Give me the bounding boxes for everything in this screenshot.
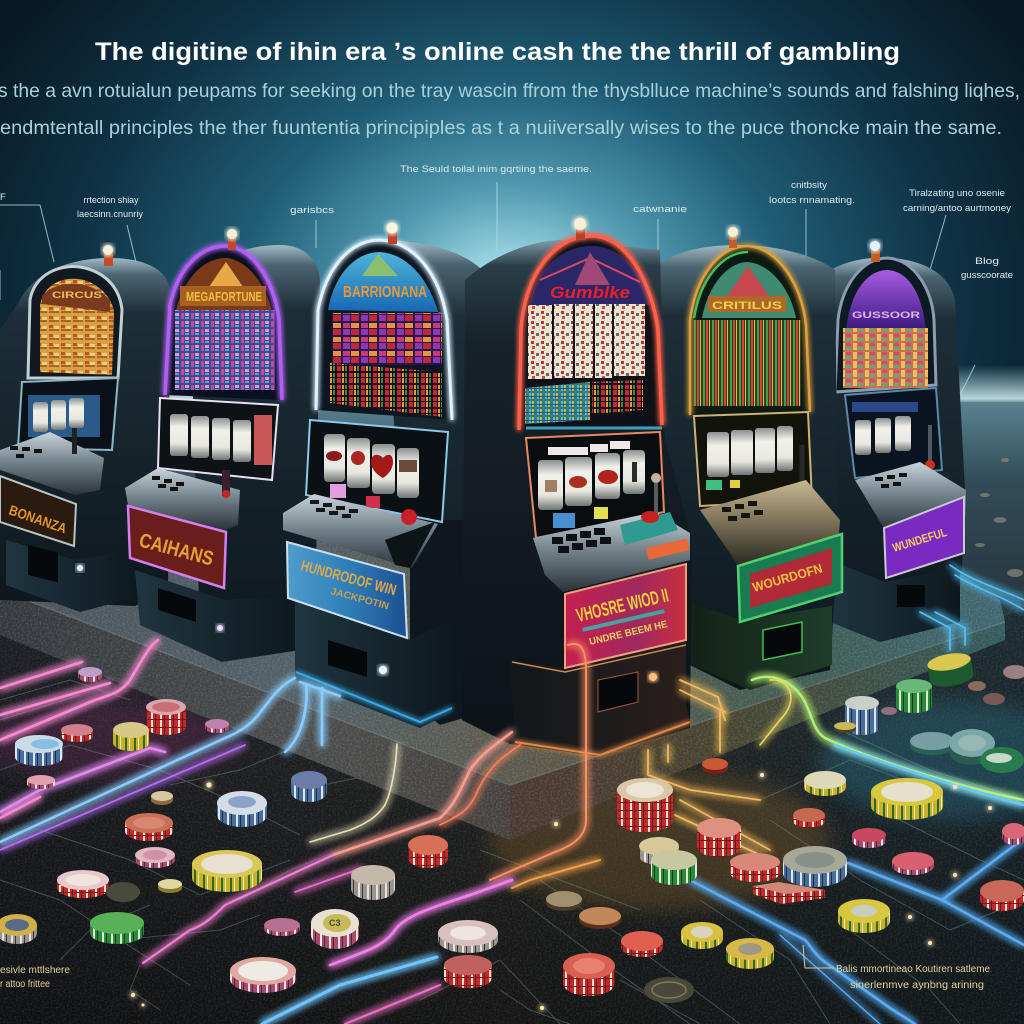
chip: flat red white [753, 882, 825, 904]
label blog: Blog [975, 256, 999, 267]
belly glass [738, 534, 842, 622]
deck [855, 462, 966, 530]
base [295, 598, 452, 728]
slot machine 5: green and gold: CRITILUS [712, 300, 782, 312]
cabinet [380, 240, 480, 722]
chip: pink flat [27, 775, 55, 789]
chip: red small [61, 724, 93, 742]
footnote bottom left [0, 965, 70, 990]
chip: dark bronze [644, 977, 694, 1003]
chip: pink far [205, 719, 229, 733]
cream line [310, 744, 397, 842]
chip: green stack [896, 679, 932, 713]
chips: left field [0, 667, 498, 993]
marquee and paytable [690, 246, 810, 415]
footnote bottom left: esivle mttlshere [0, 965, 70, 976]
reels window [694, 412, 812, 506]
lever [72, 428, 77, 454]
chip: teal round [949, 729, 995, 765]
chip: pink [135, 847, 175, 868]
chip: small red 2 [793, 808, 825, 828]
belly glass [0, 476, 76, 546]
chip: white blue [217, 791, 267, 827]
deck [700, 480, 840, 565]
beacon [386, 222, 398, 244]
chip: yellow edge [0, 914, 37, 944]
marquee and paytable [165, 246, 282, 400]
slot machine 4: centre red [462, 218, 692, 756]
chip: green spill [980, 747, 1024, 773]
chip: pink far lower [264, 918, 300, 936]
chip: dark [106, 882, 140, 902]
reels window [18, 378, 118, 450]
footnote bottom right: Balis mmortineao Koutiren satleme [836, 964, 990, 975]
chip: pink red stack [697, 818, 741, 857]
chip: tan [546, 891, 582, 911]
footnote bottom right [803, 945, 990, 991]
chip: blue white [15, 735, 63, 766]
chips: right field [546, 650, 1024, 1003]
start button [401, 509, 417, 525]
label far left: F [0, 192, 6, 203]
lever [928, 425, 932, 470]
start button [641, 511, 659, 523]
scattered coins on far floor [975, 458, 1023, 577]
cabinet side [462, 240, 692, 756]
base [135, 570, 300, 662]
chip: cream pair back [639, 837, 679, 865]
chip: red stack near centre [408, 835, 448, 868]
belly glass [287, 542, 407, 638]
cabinet [650, 245, 838, 690]
lever [654, 482, 658, 520]
chip: grey stack upper [845, 696, 879, 735]
foreground circuit floor [0, 590, 1024, 1024]
marquee and paytable [519, 236, 662, 430]
label machine 1: laecsinn.cnunriy [77, 209, 143, 220]
red lead from belly to floor [490, 644, 586, 880]
stone platform [0, 540, 1005, 840]
chip: yellow [838, 899, 890, 933]
label machine 1 [77, 195, 143, 220]
pink and blue bottom lines [330, 880, 512, 965]
horizon glow band [0, 365, 1024, 407]
slot machine 3: blue: BARRIONANA [343, 284, 427, 301]
cabinet [800, 258, 965, 640]
chip: grey large [783, 846, 847, 887]
label machine 5 right: lootcs rnnamating. [769, 195, 855, 206]
belly glass [128, 506, 226, 588]
base [510, 640, 690, 755]
beacon [728, 227, 738, 248]
beacon [227, 229, 237, 250]
label machine 5: catwnanie [633, 204, 687, 215]
slot machine 5: green and gold: WOURDOFN [751, 561, 824, 595]
purple shadow of blue line [0, 745, 245, 850]
green to blue line [752, 677, 1024, 800]
label blog [961, 256, 1013, 281]
glowing neon connection lines [0, 565, 1024, 1024]
reels window [158, 398, 278, 480]
chip: pink white [57, 870, 109, 898]
chip: white with yellow centre: C3 [329, 918, 341, 928]
belly glass [565, 564, 686, 668]
label top centre: The Seuld toilal inim gqrtiing the saeme. [400, 164, 592, 175]
chip: blue grey [291, 771, 327, 802]
chip: red large lower [563, 953, 615, 996]
chip: large pink white [230, 957, 296, 993]
deck [125, 468, 240, 530]
chip: yellow green tilted [926, 650, 975, 689]
marquee and paytable [835, 258, 936, 392]
label leader lines [0, 182, 975, 415]
chip: yellow orange [726, 938, 774, 969]
chip: large green yellow [192, 850, 262, 892]
reels window [526, 432, 664, 538]
label machine 1: rrtection shiay [84, 195, 139, 206]
slot machine 2: purple: MEGAFORTUNE [186, 289, 262, 304]
chip: yellow white [804, 771, 846, 796]
intro line 2: endmtentall principles the ther fuuntentia principiples as t a nuiiversally wises to the puce thoncke main the same. [0, 117, 1002, 139]
label machine 3: garisbcs [290, 205, 334, 216]
base [6, 540, 140, 612]
blue lines, far right [920, 565, 1024, 650]
deck [533, 512, 690, 592]
amber lines, machine 5 side [648, 680, 770, 855]
slot machine 6: far right: GUSSOOR [852, 310, 921, 320]
cabinet light [77, 565, 83, 571]
slot machine 4: centre red: VHOSRE WIOD II [574, 585, 671, 627]
label blog: gusscoorate [961, 270, 1013, 281]
chip: yellow [113, 722, 149, 751]
orange to pink line, machine 4 [333, 732, 512, 855]
slot machine 1: far left: CIRCUS [52, 290, 102, 300]
marquee and paytable [28, 267, 122, 378]
sparkle lights on floor [131, 773, 992, 1010]
label machine 6 [903, 188, 1011, 214]
slot machine 3: blue: HUNDRODOF WIN [299, 557, 398, 599]
cabinet [190, 245, 320, 650]
slot machine 4: centre red: Gumblke [550, 283, 630, 302]
chip: red far right [980, 880, 1024, 911]
outline [316, 240, 452, 420]
chip: tiny mauve [881, 707, 897, 715]
blue floor lines, right [690, 838, 1024, 1024]
deck [283, 494, 438, 568]
chip: pink right [892, 852, 934, 875]
label machine 6: carning/antoo aurtmoney [903, 203, 1011, 214]
cabinet [0, 258, 170, 606]
slot machine 2: purple: CAIHANS [137, 530, 216, 570]
callout labels [0, 164, 1013, 281]
slot machine 6: far right: WUNDEFUL [891, 525, 948, 555]
base [682, 600, 832, 690]
chip: green cream [651, 850, 697, 885]
slot machine 3: blue: JACKPOTIN [329, 586, 390, 612]
chip: tiny brown [968, 681, 986, 691]
deck [0, 432, 104, 495]
chip: yellow tiny [834, 722, 856, 733]
label machine 5 right: cnitbsity [791, 180, 827, 191]
footnote bottom right: sinerlenmve aynbng arining [850, 980, 984, 991]
chip: red [125, 813, 173, 841]
chip: green [90, 912, 144, 944]
thin circuit board traces [0, 680, 1024, 1024]
base [830, 560, 960, 642]
chip: tan [151, 791, 173, 805]
neon outline [519, 236, 662, 430]
chip: bright white pair [438, 920, 498, 953]
far floor behind machines [0, 402, 1024, 662]
slot machine 5: green and gold [650, 227, 842, 690]
intro line 1: s the a avn rotuialun peupams for seeking on the tray wascin ffrom the thysblluce machine’s sounds and falshing liqhes, [0, 80, 1020, 102]
outline [690, 246, 810, 415]
blue line, machine 3 [0, 678, 340, 842]
intro text block [0, 80, 1020, 139]
slot machine 2: purple [125, 229, 320, 662]
label machine 5 right [769, 180, 855, 206]
chip: pink [730, 853, 780, 882]
reels window [306, 420, 448, 522]
slot machine 1: far left: BONANZA [7, 502, 69, 536]
chip: white with yellow centre [311, 909, 359, 949]
belly glass [884, 497, 964, 578]
beacon [870, 241, 880, 262]
slot machine 3: blue [283, 222, 480, 728]
beacon [103, 245, 113, 266]
chip: red lower [621, 931, 663, 957]
chip: grey stack [351, 865, 395, 900]
title: The digitine of ihin era ʼs online cash the the thrill of gambling [95, 38, 900, 66]
chip: teal [910, 732, 954, 755]
lever [800, 445, 804, 488]
chip: small brown [983, 693, 1005, 705]
chip: pink far right [1002, 823, 1024, 845]
neon outline [165, 246, 282, 400]
slot machine 6: far right [800, 241, 966, 642]
marquee and paytable [316, 240, 452, 420]
footnote bottom left: r attoo frittee [0, 979, 50, 990]
chip: small pink [78, 667, 102, 682]
chip: red stack [146, 699, 186, 735]
chip: large yellow white [871, 778, 943, 820]
chip: far corner [1003, 665, 1024, 679]
label machine 6: Tiralzating uno osenie [909, 188, 1005, 199]
reels window [845, 388, 942, 478]
slot machine 4: centre red: UNDRE BEEM HE [588, 619, 669, 648]
pink lines, left [0, 640, 165, 818]
slot machine 1: far left [0, 245, 170, 612]
chip: orange [579, 907, 621, 929]
chip: tall red stack [617, 778, 673, 832]
chip: small red [702, 758, 728, 774]
chip: pink small [852, 828, 886, 848]
chip: dark red [444, 955, 492, 988]
beacon [574, 218, 586, 240]
chip: yellow lower [681, 922, 723, 949]
chip: cream [158, 879, 182, 893]
